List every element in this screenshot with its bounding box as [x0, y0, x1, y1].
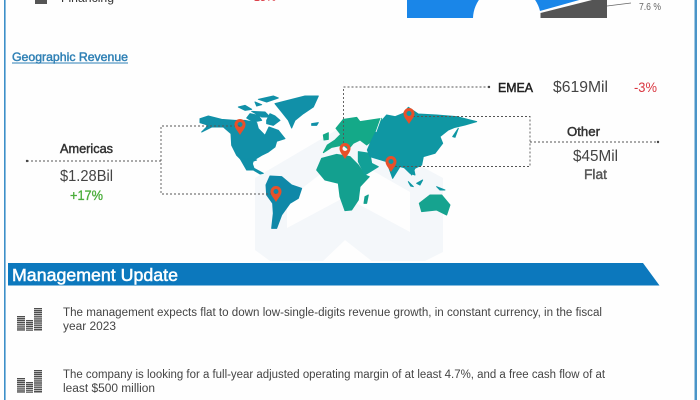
pin: north america: [234, 119, 246, 135]
region: other: Flat: [584, 167, 607, 182]
icon: coin stacks 2: [21, 370, 38, 393]
text: margin and cash flow outlook: least $500 million: [63, 383, 155, 395]
region: emea: -3%: [634, 80, 657, 95]
donut label: 7.6 %: 7.6 %: [639, 2, 661, 13]
text: revenue outlook: year 2023: [63, 321, 116, 333]
region: emea: $619Mil: [553, 79, 608, 96]
map: north america and greenland: [200, 96, 318, 167]
world map: [200, 96, 477, 228]
heading: geographic revenue: Geographic Revenue: [12, 50, 128, 64]
text: margin and cash flow outlook: [63, 369, 606, 395]
region: americas: [26, 142, 113, 203]
region: other: Other: [567, 125, 600, 139]
pin: europe: [340, 143, 350, 159]
donut segment: blue: [407, 0, 600, 18]
region: emea: EMEA: [498, 81, 534, 95]
text: revenue outlook: [63, 307, 602, 333]
pin: russia: [404, 108, 415, 124]
map: asia: [367, 107, 477, 178]
icon: financing legend swatch: [35, 0, 47, 4]
donut segment: grey 7.6%: [540, 0, 607, 18]
connector lines: [27, 87, 658, 194]
region: other: [567, 125, 659, 182]
region: emea: [488, 79, 657, 96]
region: americas: Americas: [60, 142, 113, 156]
map: south america, africa, australia: [266, 152, 450, 228]
donut chart (cropped): [407, 0, 661, 18]
region: americas: $1.28Bil: [60, 168, 113, 185]
banner: management update: Management Update: [12, 265, 178, 285]
icon: coin stacks 1: [21, 308, 38, 331]
pin: india: [386, 156, 396, 172]
banner: management update: [8, 263, 660, 286]
region: other: $45Mil: [573, 148, 618, 165]
pin: south america: [270, 186, 282, 202]
region: americas: +17%: [70, 188, 103, 203]
map pins: [234, 108, 415, 202]
donut label: 7.6 %: [607, 2, 661, 13]
map: mexico and central america: [240, 158, 263, 174]
text: margin and cash flow outlook: The company is looking for a full-year adjusted operating margin of at least 4.7%, and a free cash flow of at: [63, 369, 606, 381]
map: europe: [323, 117, 382, 153]
financing legend row (cropped): [35, 0, 276, 5]
watermark logo: [255, 125, 443, 262]
text: revenue outlook: The management expects flat to down low-single-digits revenue growth, in constant currency, in the fiscal: [63, 307, 602, 319]
